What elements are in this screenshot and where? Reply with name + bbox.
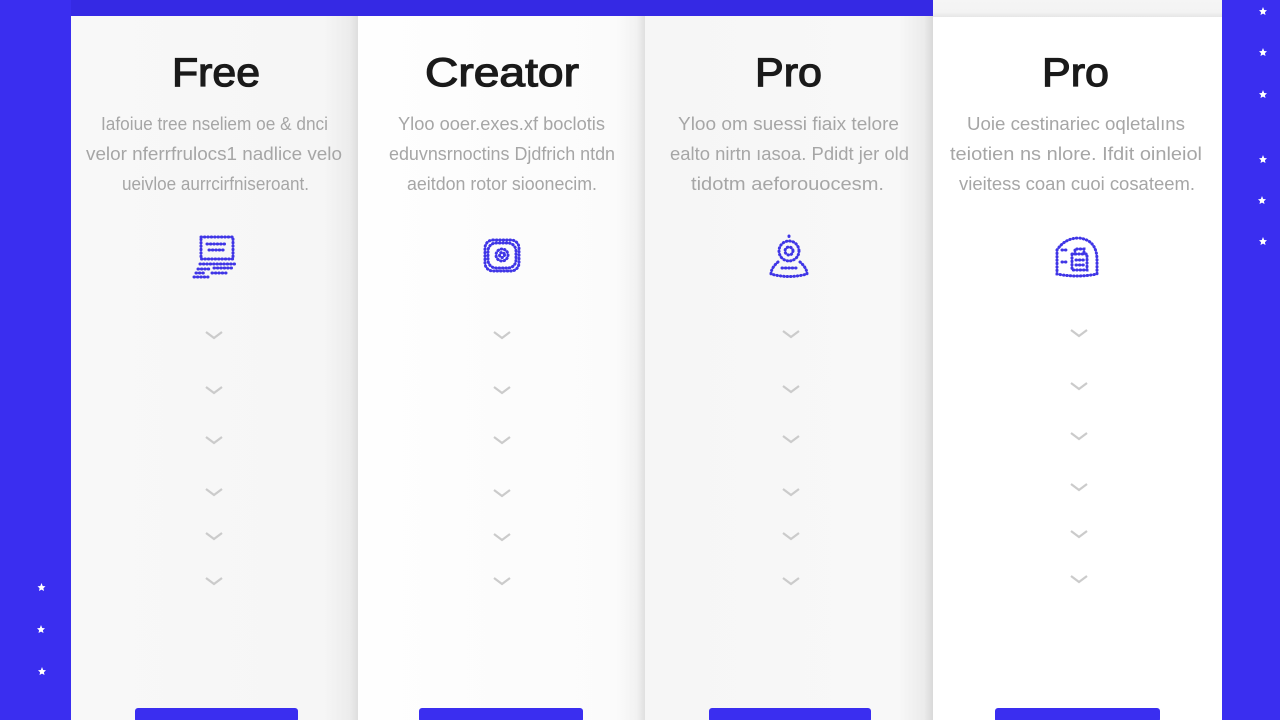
heading: Pro second: Pro — [1042, 51, 1109, 95]
description: Pro: Yloo om suessi fiaix telore — [678, 114, 899, 134]
description: Pro second: Uoie cestinariec oqletalıns — [967, 114, 1185, 134]
icon: lock badge — [1057, 238, 1097, 276]
button: Pro second — [995, 708, 1160, 720]
button: Free — [135, 708, 298, 720]
description: Free: ueivloe aurrcirfniseroant. — [122, 174, 309, 194]
icon: gear badge — [485, 240, 519, 271]
button: Creator — [419, 708, 583, 720]
panel: Pro — [645, 16, 933, 720]
top strip above fourth panel — [933, 0, 1222, 17]
top bar above first three panels — [71, 0, 933, 16]
heading: Creator: Creator — [425, 51, 579, 95]
description: Creator — [389, 114, 615, 194]
heading: Pro: Pro — [755, 51, 822, 95]
stars: left column — [37, 583, 46, 675]
panel: Creator — [358, 16, 645, 720]
icon: figure with gear — [771, 236, 807, 276]
description: Free: velor nferrfrulocs1 nadlice velo — [86, 144, 342, 164]
panel: Free — [71, 16, 358, 720]
description: Pro: tidotm aeforouocesm. — [691, 174, 884, 194]
panel: Pro highlighted — [933, 17, 1222, 720]
heading: Free: Free — [172, 51, 260, 95]
description: Pro second — [950, 114, 1202, 194]
description: Pro second: teiotien ns nlore. Ifdit oinleiol — [950, 144, 1202, 164]
description: Pro — [670, 114, 909, 194]
description: Free: Iafoiue tree nseliem oe & dnci — [101, 114, 328, 134]
description: Pro second: vieitess coan cuoi cosateem. — [959, 174, 1195, 194]
description: Free — [86, 114, 342, 194]
button: Pro — [709, 708, 871, 720]
feature checkmarks: Pro — [783, 331, 799, 584]
stars: right column — [1258, 7, 1267, 245]
feature checkmarks: Creator — [494, 332, 510, 584]
description: Creator: eduvnsrnoctins Djdfrich ntdn — [389, 144, 615, 164]
feature checkmarks: Pro second — [1071, 330, 1087, 582]
description: Pro: ealto nirtn ıasoa. Pdidt jer old — [670, 144, 909, 164]
description: Creator: aeitdon rotor sioonecim. — [407, 174, 597, 194]
icon: monitor and people — [194, 237, 236, 277]
description: Creator: Yloo ooer.exes.xf boclotis — [398, 114, 605, 134]
feature checkmarks: Free — [206, 332, 222, 584]
